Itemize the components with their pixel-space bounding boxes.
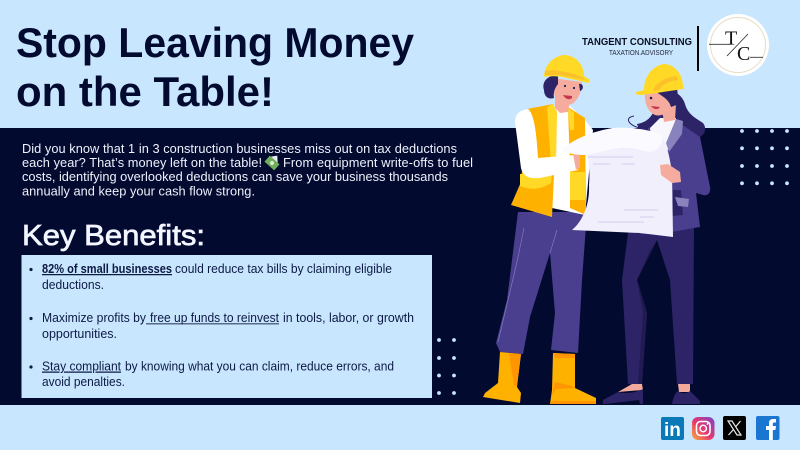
- divider: [697, 26, 699, 71]
- brand name: TANGENT CONSULTING: [582, 36, 692, 48]
- bullet one: deductions.: [42, 278, 104, 292]
- icon: linkedin: in: [664, 420, 681, 441]
- logo: C: [737, 43, 750, 65]
- woman shirt: [650, 118, 676, 150]
- man shirt: [552, 106, 593, 215]
- man hair: [543, 76, 583, 99]
- title: Stop Leaving Money: [16, 19, 415, 66]
- panel: benefits list: [22, 255, 432, 398]
- dot pattern: lower middle: [437, 338, 456, 395]
- bullet two: [29, 311, 414, 341]
- logo: T: [725, 28, 737, 50]
- dot pattern: top right: [740, 129, 789, 185]
- logo: [707, 14, 769, 76]
- blueprint paper: [562, 128, 673, 237]
- bullet three: by knowing what you can claim, reduce errors, and: [125, 360, 394, 374]
- panel: dark navy band: [0, 128, 800, 405]
- brand name: [582, 36, 692, 57]
- intro paragraph: annually and keep your cash flow strong.: [22, 184, 255, 198]
- man vest: [511, 104, 557, 217]
- title: on the Table!: [16, 68, 274, 115]
- illustration: man: [483, 55, 596, 404]
- icon: x: [723, 416, 746, 440]
- brand name: TAXATION.ADVISORY: [609, 48, 673, 57]
- bullet three: Stay compliant: [42, 360, 122, 374]
- man helmet: [544, 55, 590, 83]
- man hand: [573, 154, 580, 170]
- woman helmet: [636, 64, 684, 95]
- man right boot: [550, 353, 596, 404]
- bullet two: free up funds to reinvest: [150, 311, 280, 325]
- icon: instagram: [692, 417, 714, 440]
- title: [16, 19, 415, 115]
- man sleeve: [515, 109, 578, 178]
- woman lapel: [666, 119, 683, 152]
- woman hand: [660, 164, 681, 183]
- illustration: woman: [603, 64, 710, 404]
- intro paragraph: [22, 141, 473, 198]
- intro paragraph: costs, identifying overlooked deductions can save your business thousands: [22, 169, 448, 184]
- icon: money with wings: [264, 152, 283, 170]
- intro paragraph: each year? That’s money left on the table!: [22, 155, 262, 170]
- bullet three: avoid penalties.: [42, 375, 125, 389]
- woman hair: [637, 91, 705, 137]
- bullet one: 82% of small businesses: [42, 262, 172, 276]
- intro paragraph: Did you know that 1 in 3 construction businesses miss out on tax deductions: [22, 141, 457, 156]
- bullet two: Maximize profits by: [42, 311, 147, 325]
- bullet three: [29, 360, 394, 389]
- woman feet: [618, 384, 690, 392]
- woman neck and face: [662, 104, 676, 122]
- icon: facebook: [756, 416, 780, 440]
- man trousers: [496, 212, 587, 354]
- bullet one: could reduce tax bills by claiming eligible: [175, 262, 392, 276]
- heading: key benefits: Key Benefits:: [22, 220, 205, 252]
- man neck and face: [555, 96, 570, 113]
- woman legs: [622, 225, 694, 384]
- icon: linkedin: [661, 417, 684, 441]
- woman shoes: [603, 389, 700, 404]
- intro paragraph: From equipment write-offs to fuel: [283, 155, 473, 170]
- woman jacket: [640, 120, 710, 234]
- man left boot: [483, 352, 521, 403]
- bullet two: opportunities.: [42, 327, 117, 341]
- bullet one: [29, 262, 392, 292]
- bullet two: in tools, labor, or growth: [283, 311, 414, 325]
